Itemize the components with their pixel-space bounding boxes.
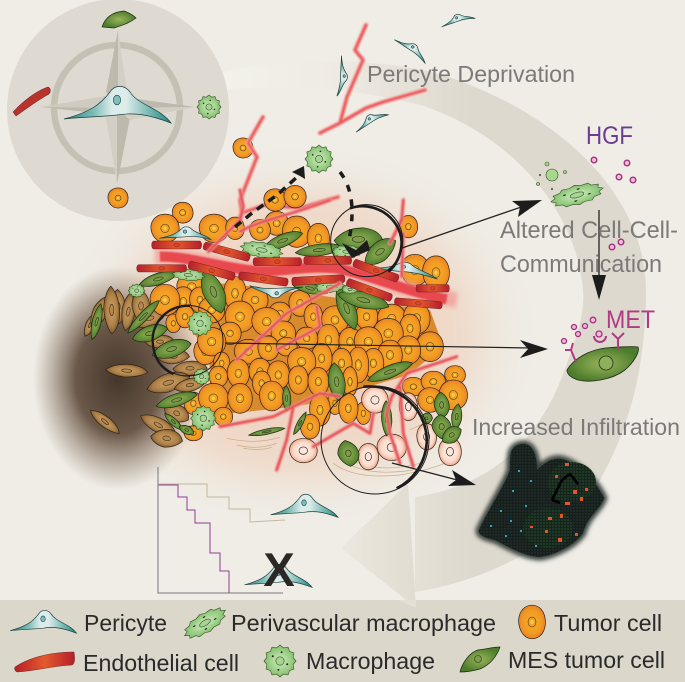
- legend: MES tumor cell: MES tumor cell: [508, 647, 665, 673]
- compass centre pericyte: [64, 86, 171, 123]
- stray macrophage: [305, 145, 333, 173]
- compass panel: [7, 0, 229, 221]
- MET receptor cell: [562, 317, 638, 381]
- pericytes on vessel: [159, 227, 439, 298]
- legend: tumor cell: [519, 605, 662, 639]
- hatched stroma: [227, 423, 445, 476]
- legend: perivascular macrophage: Perivascular macrophage: [231, 610, 496, 636]
- label: Altered Cell-Cell-Communication: Communication: [500, 251, 662, 278]
- tumor mass base: [180, 283, 443, 413]
- legend: pericyte: Pericyte: [84, 610, 167, 636]
- arrow HGF to MET: [592, 210, 606, 300]
- endothelial cells: [137, 241, 449, 309]
- label: HGF: HGF: [586, 122, 633, 150]
- compass icon: tumor cell: [108, 188, 128, 208]
- compass icon: endothelial cell: [13, 87, 50, 116]
- pink infiltrating cells: [289, 383, 461, 470]
- label: Altered Cell-Cell-Communication: Altered Cell-Cell-: [500, 217, 678, 244]
- compass icon: MES tumor cell: [102, 11, 136, 28]
- macrophages: [128, 238, 362, 431]
- dashed arrow: curved into niche: [340, 172, 370, 258]
- pericyte-high annotation: [271, 494, 338, 517]
- pericyte-deprived annotation: X: [263, 543, 295, 596]
- arrow to HGF macrophage: [402, 200, 542, 248]
- arrow to MET cell: [225, 340, 548, 358]
- brown necrotic cells: [81, 286, 207, 450]
- arrow to histology: [392, 463, 476, 486]
- MES tumor cells: [88, 228, 465, 468]
- focus circle: perivascular niche: [331, 205, 403, 277]
- legend: macrophage: [264, 645, 435, 677]
- legend: pericyte: [10, 610, 167, 636]
- survival curve chart: [158, 467, 285, 593]
- legend: endothelial cell: [15, 650, 239, 676]
- main blood vessel: [155, 256, 457, 300]
- legend: endothelial cell: Endothelial cell: [83, 650, 239, 676]
- legend panel: [0, 600, 685, 682]
- branching capillaries: [208, 190, 457, 470]
- dashed arrow: macrophage recruitment: [235, 166, 305, 227]
- tumor cells: [150, 185, 468, 441]
- label: MET: MET: [606, 306, 655, 334]
- focus circle: infiltrating region: [321, 386, 429, 494]
- HGF secretion group: [536, 157, 636, 250]
- histology image: [479, 444, 604, 557]
- legend: perivascular macrophage: [179, 602, 496, 644]
- legend: tumor cell: Tumor cell: [554, 610, 662, 636]
- legend: macrophage: Macrophage: [306, 648, 435, 674]
- compass icon: macrophage: [197, 95, 221, 119]
- tissue glow: [55, 140, 545, 530]
- detached pericytes: [337, 10, 475, 133]
- pericyte-deprived annotation: [245, 543, 312, 596]
- dark necrotic shadow: [33, 266, 203, 490]
- title: Pericyte Deprivation: Pericyte Deprivation: [367, 61, 575, 87]
- small sprouting vessels top: [233, 25, 425, 232]
- tumor tissue illustration: [81, 185, 468, 494]
- focus circle: invasion front: [152, 305, 223, 376]
- circular arrow band: [195, 62, 646, 608]
- stray tumor cell: [233, 138, 253, 158]
- label: Increased Infiltration: Increased Infiltration: [472, 414, 680, 440]
